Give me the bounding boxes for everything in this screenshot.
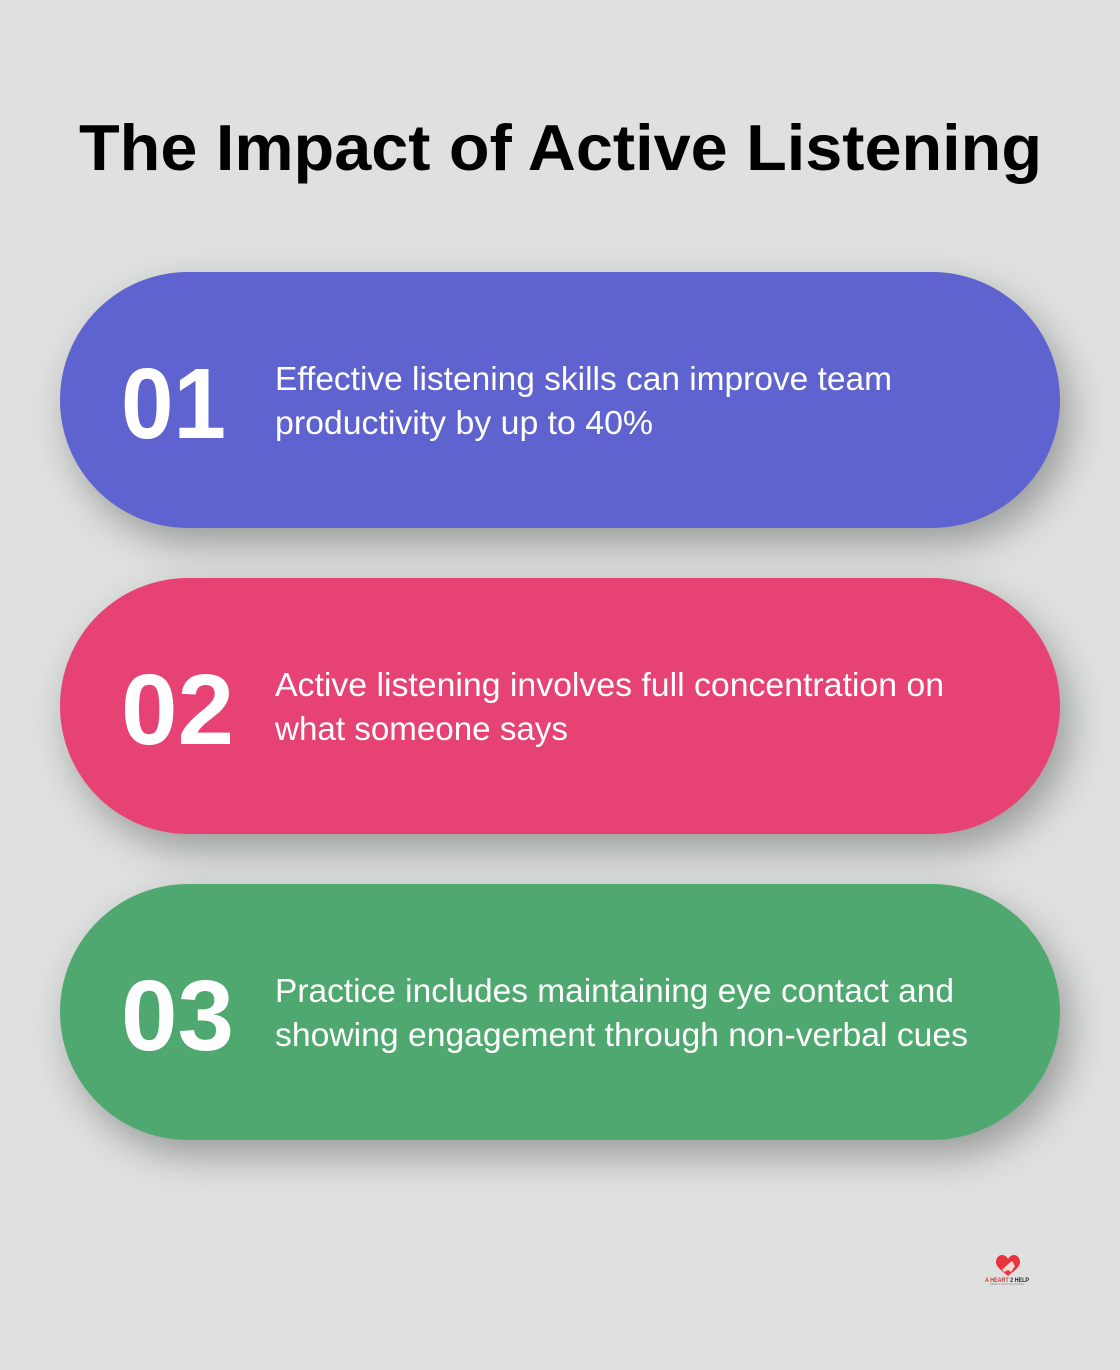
- item 01 text: Effective listening skills can improve team: [275, 360, 892, 397]
- panel: item 03: [60, 884, 1060, 1140]
- item 03 text: [275, 972, 968, 1053]
- item 03 text: Practice includes maintaining eye contact and: [275, 972, 954, 1009]
- title: The Impact of Active Listening: [79, 111, 1042, 184]
- item 01 text: productivity by up to 40%: [275, 404, 653, 441]
- item 03 text: showing engagement through non-verbal cues: [275, 1016, 968, 1053]
- number 03: 03: [121, 960, 234, 1072]
- item 02 text: [274, 666, 944, 747]
- item 02 text: what someone says: [274, 710, 568, 747]
- logo: A Heart 2 Help: [985, 1255, 1029, 1286]
- icon: heart: [996, 1255, 1020, 1276]
- number 02: 02: [121, 654, 234, 766]
- logo tagline: PEOPLE HELPING PEOPLE: [990, 1283, 1024, 1286]
- item 02 text: Active listening involves full concentration on: [275, 666, 944, 703]
- number 01: 01: [121, 348, 226, 460]
- panel: item 02: [60, 578, 1060, 834]
- panel: item 01: [60, 272, 1060, 528]
- item 01 text: [275, 360, 892, 441]
- logo wordmark: A HEART 2 HELP: [985, 1278, 1029, 1284]
